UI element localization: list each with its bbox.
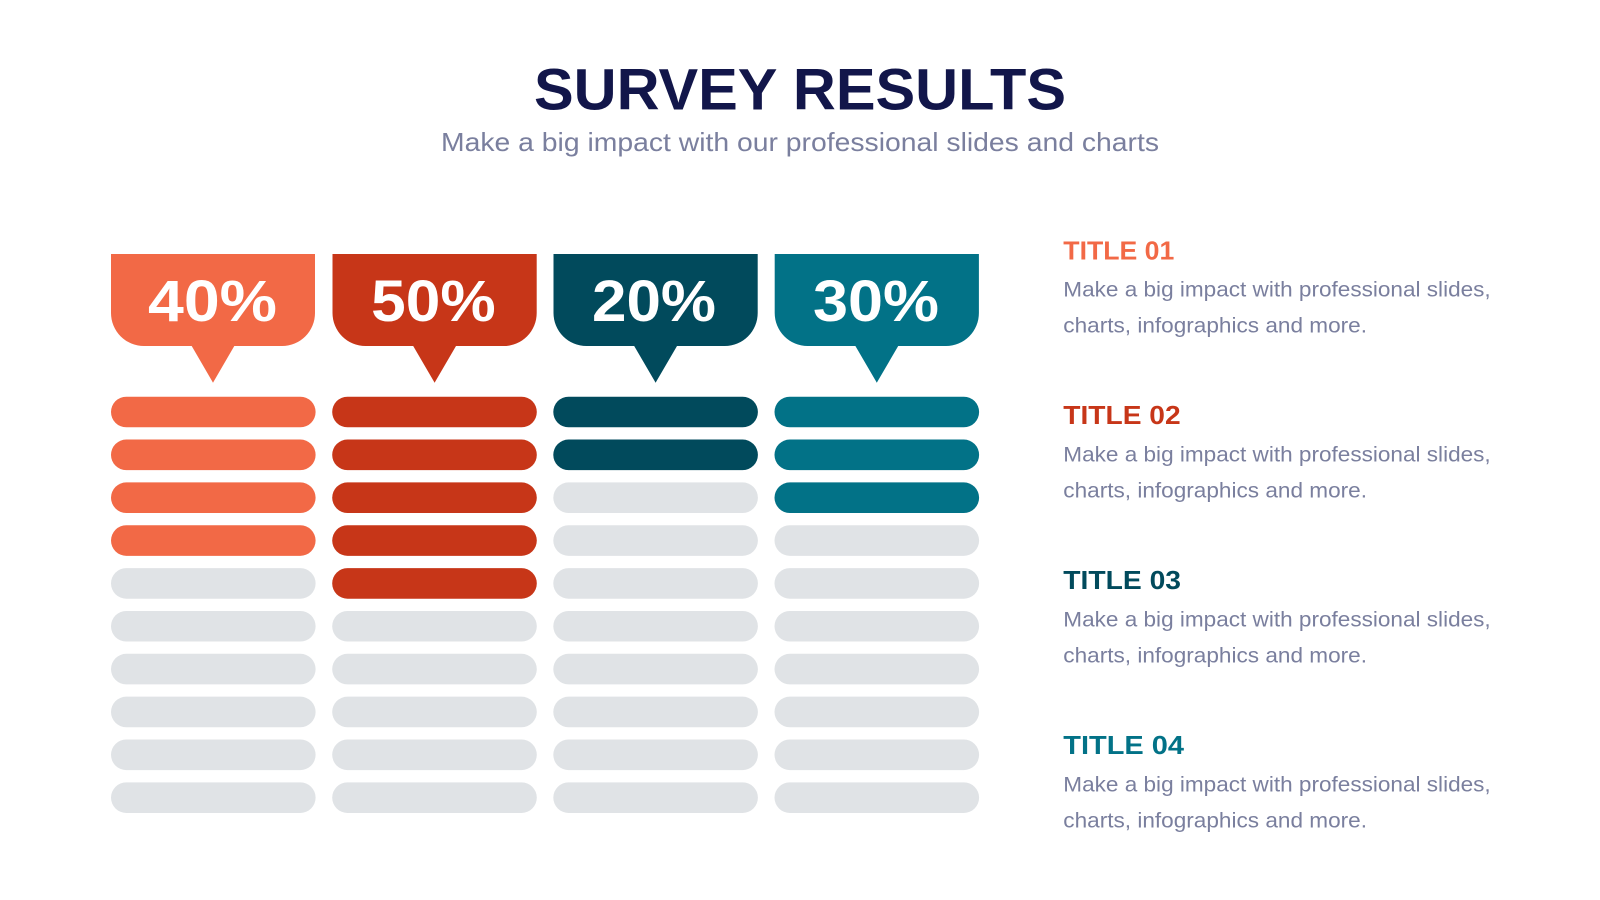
text block: title 01 <box>1063 235 1491 338</box>
bars: 3 of 10 filled <box>774 397 979 813</box>
text block: title 02: Make a big impact with professional slides, <box>1063 443 1491 466</box>
callout: 20% <box>554 254 758 383</box>
title: SURVEY RESULTS <box>534 58 1066 122</box>
text block: title 02: TITLE 02 <box>1063 400 1181 430</box>
callout: 40% <box>111 254 315 383</box>
panel: column 2, 50% <box>332 254 537 813</box>
panel: column 3, 20% <box>553 254 758 813</box>
callout: 40%: 40% <box>148 269 277 334</box>
bars: 4 of 10 filled <box>111 397 316 813</box>
text block: title 03 <box>1063 565 1491 667</box>
text block: title 01: Make a big impact with professional slides, <box>1063 279 1491 302</box>
bars: 2 of 10 filled <box>553 397 758 813</box>
bars: 5 of 10 filled <box>332 397 537 813</box>
text block: title 04: TITLE 04 <box>1063 730 1185 760</box>
text block: title 03: charts, infographics and more. <box>1063 644 1367 667</box>
text block: title 03: TITLE 03 <box>1063 565 1181 595</box>
text block: title 01: TITLE 01 <box>1063 235 1174 265</box>
callout: 30%: 30% <box>813 269 939 334</box>
subtitle: Make a big impact with our professional slides and charts <box>441 127 1159 157</box>
text block: title 04: Make a big impact with professional slides, <box>1063 773 1491 796</box>
text block: title 01: charts, infographics and more. <box>1063 315 1367 338</box>
panel: column 4, 30% <box>774 254 979 813</box>
text block: title 03: Make a big impact with professional slides, <box>1063 608 1491 631</box>
text block: title 04: charts, infographics and more. <box>1063 809 1367 832</box>
callout: 50% <box>332 254 537 383</box>
panel: column 1, 40% <box>111 254 316 813</box>
text block: title 02: charts, infographics and more. <box>1063 479 1367 502</box>
callout: 20%: 20% <box>592 269 716 334</box>
callout: 50%: 50% <box>371 269 496 334</box>
text block: title 02 <box>1063 400 1491 502</box>
text block: title 04 <box>1063 730 1491 832</box>
callout: 30% <box>775 254 979 383</box>
